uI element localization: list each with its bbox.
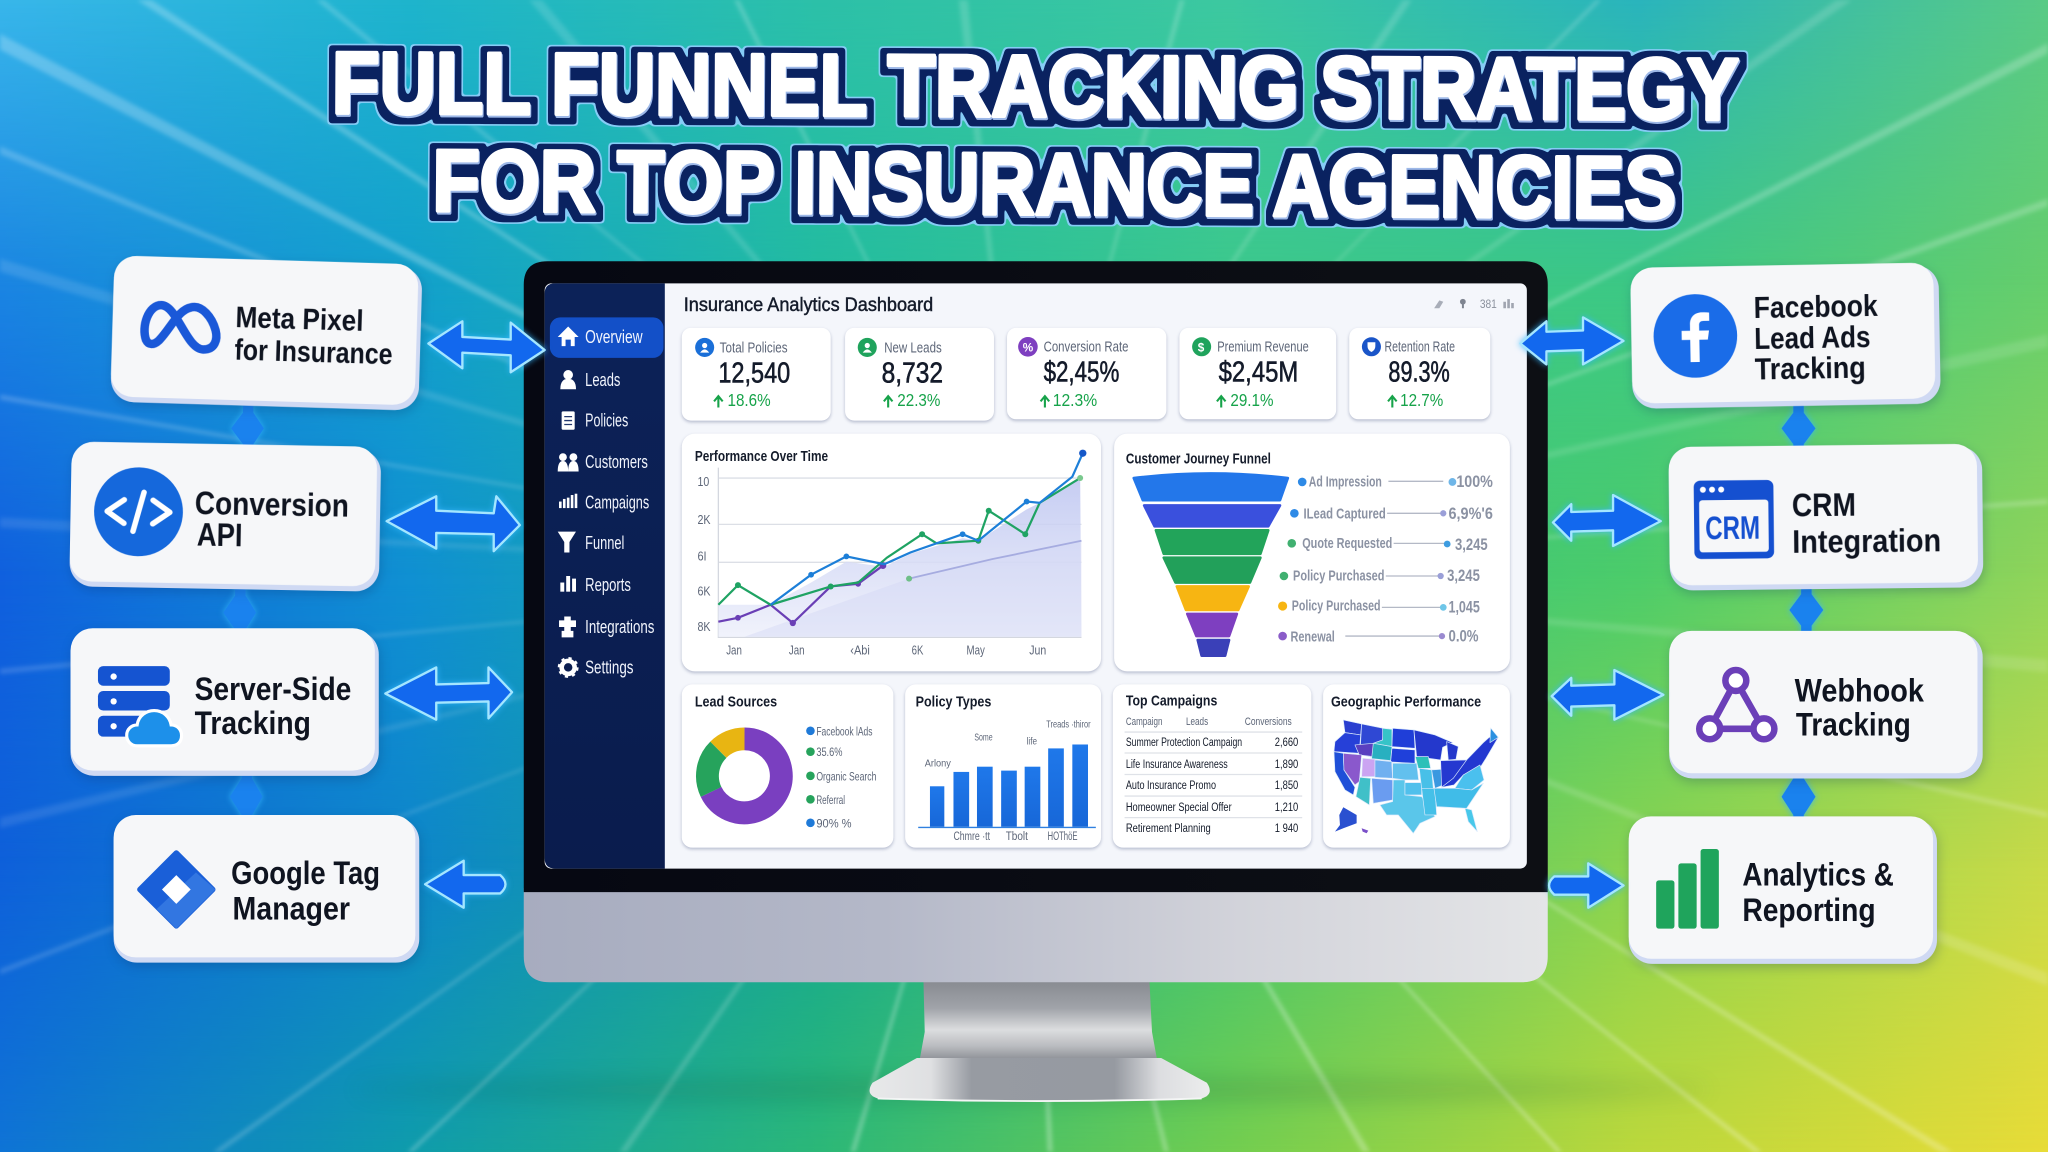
menu item: Reports xyxy=(560,574,631,595)
table header xyxy=(1126,716,1292,728)
KPI card: Retention Rate xyxy=(1349,328,1490,419)
label xyxy=(234,301,394,371)
x-axis labels: Jun xyxy=(1029,642,1046,657)
KPI card: Premium Revenue: $2,45M xyxy=(1219,356,1298,388)
KPI card: Conversion Rate: $2,45% xyxy=(1044,356,1119,388)
dashboard heading: Insurance Analytics Dashboard xyxy=(684,294,933,316)
funnel labels xyxy=(1278,473,1493,645)
table rows: 1,210 xyxy=(1275,801,1299,814)
label: CRM xyxy=(1792,486,1856,523)
KPI card: Premium Revenue: 29.1% xyxy=(1230,390,1274,410)
bar labels xyxy=(925,720,1091,843)
legend: 90% % xyxy=(816,816,852,830)
label: Analytics & xyxy=(1742,856,1894,893)
bars xyxy=(930,744,1088,827)
label: Conversion xyxy=(195,484,349,524)
label: Server-Side xyxy=(195,670,351,707)
KPI card: Conversion Rate: Conversion Rate xyxy=(1044,338,1128,355)
label xyxy=(1792,485,1941,560)
monitor stand xyxy=(870,980,1210,1101)
label: Meta Pixel xyxy=(235,301,364,338)
KPI card: Total Policies: 18.6% xyxy=(728,390,771,410)
panel: Top Campaigns table: Top Campaigns xyxy=(1126,693,1217,709)
bar labels: Chmre ·tt xyxy=(953,830,991,843)
KPI card: New Leads xyxy=(845,328,994,421)
menu item: Customers: Customers xyxy=(585,451,648,472)
menu item: Policies: Policies xyxy=(585,409,628,430)
KPI card: Premium Revenue: $ xyxy=(1198,341,1205,354)
card: Meta Pixel for Insurance xyxy=(110,255,423,411)
header status icons xyxy=(1434,298,1514,311)
card: Google Tag Manager xyxy=(114,815,419,963)
y-axis labels xyxy=(697,474,711,634)
card: Conversion API xyxy=(69,441,381,592)
table rows: 1,890 xyxy=(1275,758,1299,771)
table rows: Life Insurance Awareness xyxy=(1126,758,1228,771)
icon: Meta infinity logo xyxy=(144,305,217,350)
bar labels: Some xyxy=(974,733,993,744)
bar labels: Treads ·thiror xyxy=(1046,720,1091,731)
arrow: dashboard to Analytics & Reporting xyxy=(1549,863,1624,908)
title xyxy=(332,34,1739,237)
label: for Insurance xyxy=(234,334,393,371)
table rows: Homeowner Special Offer xyxy=(1126,801,1232,814)
menu item: Customers xyxy=(558,451,648,472)
menu item: Reports: Reports xyxy=(585,574,631,595)
panel: Top Campaigns table xyxy=(1113,684,1311,848)
x-axis labels: May xyxy=(967,642,985,657)
card: Analytics & Reporting xyxy=(1629,816,1937,964)
panel: Policy Types bar chart xyxy=(905,684,1101,848)
KPI card: Total Policies: Total Policies xyxy=(720,340,788,357)
funnel labels: Quote Requested xyxy=(1302,536,1392,552)
label xyxy=(1742,856,1894,928)
funnel labels: 1,045 xyxy=(1448,599,1480,617)
header status icons: 381 xyxy=(1480,298,1497,311)
series: purple xyxy=(718,562,886,626)
table rows: 1 940 xyxy=(1275,822,1299,835)
label: Integration xyxy=(1792,521,1941,560)
menu item: Funnel: Funnel xyxy=(585,532,624,553)
menu item: Campaigns xyxy=(559,492,649,513)
double arrow: dashboard to Webhook Tracking xyxy=(1552,670,1663,720)
label xyxy=(1795,671,1925,742)
double arrow: Server-Side Tracking to dashboard xyxy=(385,667,512,720)
menu item: Integrations xyxy=(559,616,654,637)
label: Google Tag xyxy=(231,855,380,891)
y-axis labels: 2K xyxy=(697,512,711,527)
legend: Referral xyxy=(816,793,845,807)
funnel labels: Policy Purchased xyxy=(1292,599,1381,615)
panel: Lead Sources donut chart xyxy=(682,684,893,848)
bar labels: HOThöE xyxy=(1048,830,1078,843)
double arrow: Meta Pixel to dashboard xyxy=(428,321,545,372)
active menu item: Overview xyxy=(550,317,664,358)
table rows: Auto Insurance Promo xyxy=(1126,779,1216,792)
icon: server stack with cloud xyxy=(98,666,182,746)
KPI card: Conversion Rate xyxy=(1007,328,1166,419)
KPI card: Retention Rate: 12.7% xyxy=(1400,390,1444,410)
bar labels: Tbolt xyxy=(1006,830,1029,843)
monitor chin xyxy=(524,888,1548,982)
label: Tracking xyxy=(1796,705,1911,742)
funnel labels: 0.0% xyxy=(1448,627,1479,645)
menu item: Campaigns: Campaigns xyxy=(585,492,649,513)
panel: Performance Over Time line chart xyxy=(682,434,1101,671)
KPI card: Total Policies: 12,540 xyxy=(718,358,790,390)
series: blue xyxy=(771,450,1086,605)
table rows: 1,850 xyxy=(1275,779,1299,792)
y-axis labels: 6K xyxy=(697,584,711,599)
x-axis labels xyxy=(726,642,1046,657)
chart area fill xyxy=(718,478,1081,637)
label: Lead Ads xyxy=(1754,319,1871,356)
double arrow: Conversion API to dashboard xyxy=(387,496,520,551)
KPI card: New Leads: New Leads xyxy=(884,340,942,357)
monitor xyxy=(524,261,1548,1101)
card: Webhook Tracking xyxy=(1669,631,1983,778)
label: Reporting xyxy=(1742,891,1876,928)
dashboard screen xyxy=(545,283,1527,869)
menu item: Settings: Settings xyxy=(585,656,633,677)
funnel labels: ILead Captured xyxy=(1304,507,1386,523)
table rows: Retirement Planning xyxy=(1126,822,1211,835)
y-axis labels: 8K xyxy=(697,619,711,634)
icon: CRM browser window: CRM xyxy=(1705,509,1760,546)
double arrow: dashboard to Facebook Lead Ads xyxy=(1520,317,1624,364)
icon: CRM browser window xyxy=(1694,480,1774,559)
connectors between right cards xyxy=(1782,405,1823,823)
KPI card: Retention Rate: 89.3% xyxy=(1388,356,1450,388)
panel: Policy Types bar chart: Policy Types xyxy=(916,695,991,711)
table header: Campaign xyxy=(1126,716,1162,728)
KPI card: Total Policies xyxy=(682,328,831,421)
panel: Geographic Performance map xyxy=(1323,684,1510,848)
x-axis labels: Jan xyxy=(789,642,805,657)
menu item: Policies xyxy=(562,409,628,430)
icon: code brackets xyxy=(93,467,184,557)
KPI card: New Leads: 22.3% xyxy=(897,390,941,410)
panel: Customer Journey Funnel: Customer Journey Funnel xyxy=(1126,451,1271,468)
icon: green bar chart xyxy=(1656,849,1719,929)
menu item: Funnel xyxy=(558,532,624,553)
menu item: Settings xyxy=(559,656,633,677)
double arrow: dashboard to CRM Integration xyxy=(1553,495,1661,546)
KPI card: Conversion Rate: % xyxy=(1023,341,1034,354)
funnel labels: 100% xyxy=(1456,473,1493,491)
icon: webhook triangle xyxy=(1699,670,1774,739)
monitor bezel xyxy=(524,261,1548,892)
legend: 35.6% xyxy=(816,745,842,759)
label: Manager xyxy=(232,891,350,927)
x-axis labels: 6K xyxy=(912,642,924,657)
menu item: Integrations: Integrations xyxy=(585,616,654,637)
bar labels: life xyxy=(1027,736,1037,747)
label: Tracking xyxy=(195,704,311,741)
label: API xyxy=(197,515,243,553)
KPI card: Retention Rate: Retention Rate xyxy=(1384,338,1455,355)
table rows xyxy=(1126,736,1299,835)
label xyxy=(194,484,349,555)
label: Facebook xyxy=(1753,288,1879,325)
arrow: Google Tag Manager xyxy=(425,861,505,908)
funnel labels: Policy Purchased xyxy=(1293,569,1384,585)
menu item: Leads: Leads xyxy=(585,369,620,390)
card: Facebook Lead Ads Tracking xyxy=(1630,262,1941,409)
KPI card: Premium Revenue: Premium Revenue xyxy=(1217,338,1309,355)
label xyxy=(195,670,351,741)
y-axis labels: 10 xyxy=(697,474,709,489)
panel: Customer Journey Funnel xyxy=(1114,434,1510,671)
table rows: 2,660 xyxy=(1275,736,1299,749)
funnel labels: Ad Impression xyxy=(1309,475,1382,491)
x-axis labels: Jan xyxy=(726,642,742,657)
panel: Performance Over Time line chart: Performance Over Time xyxy=(695,449,828,465)
label: Tracking xyxy=(1754,349,1866,386)
icon: tag manager diamond xyxy=(140,853,216,929)
funnel graphic xyxy=(1134,473,1288,656)
icon: Facebook logo xyxy=(1653,293,1738,378)
menu item: Leads xyxy=(560,369,620,390)
US map xyxy=(1334,720,1498,833)
donut xyxy=(707,739,781,813)
x-axis labels: ‹Abi xyxy=(850,642,870,657)
title: FOR TOP INSURANCE AGENCIES xyxy=(432,132,1676,237)
bar labels: Arlony xyxy=(925,759,952,770)
table header: Conversions xyxy=(1245,716,1292,728)
legend: Facebook lAds xyxy=(816,724,872,738)
legend xyxy=(806,724,876,830)
KPI card: Premium Revenue xyxy=(1179,328,1336,419)
title: FULL FUNNEL TRACKING STRATEGY xyxy=(332,34,1739,139)
table header: Leads xyxy=(1186,716,1208,728)
legend: Organic Search xyxy=(816,769,876,783)
label: Webhook xyxy=(1795,671,1925,708)
funnel labels: 3,245 xyxy=(1455,536,1488,554)
label xyxy=(1753,288,1880,386)
card: Server-Side Tracking xyxy=(71,628,379,776)
funnel labels: 6,9%'6 xyxy=(1448,505,1493,523)
table rows: Summer Protection Campaign xyxy=(1126,736,1242,749)
sidebar xyxy=(545,283,665,869)
panel: Lead Sources donut chart: Lead Sources xyxy=(695,695,777,711)
funnel labels: Renewal xyxy=(1290,629,1335,645)
funnel labels: 3,245 xyxy=(1447,567,1480,585)
series: green xyxy=(718,475,1083,605)
card: CRM Integration xyxy=(1668,444,1983,591)
KPI card: Conversion Rate: 12.3% xyxy=(1053,390,1097,410)
panel: Geographic Performance map: Geographic Performance xyxy=(1331,695,1481,711)
connectors between left cards xyxy=(223,405,264,823)
y-axis labels: 6I xyxy=(697,548,707,563)
active menu item: Overview: Overview xyxy=(585,326,643,347)
label xyxy=(231,855,380,927)
KPI card: New Leads: 8,732 xyxy=(882,358,943,390)
